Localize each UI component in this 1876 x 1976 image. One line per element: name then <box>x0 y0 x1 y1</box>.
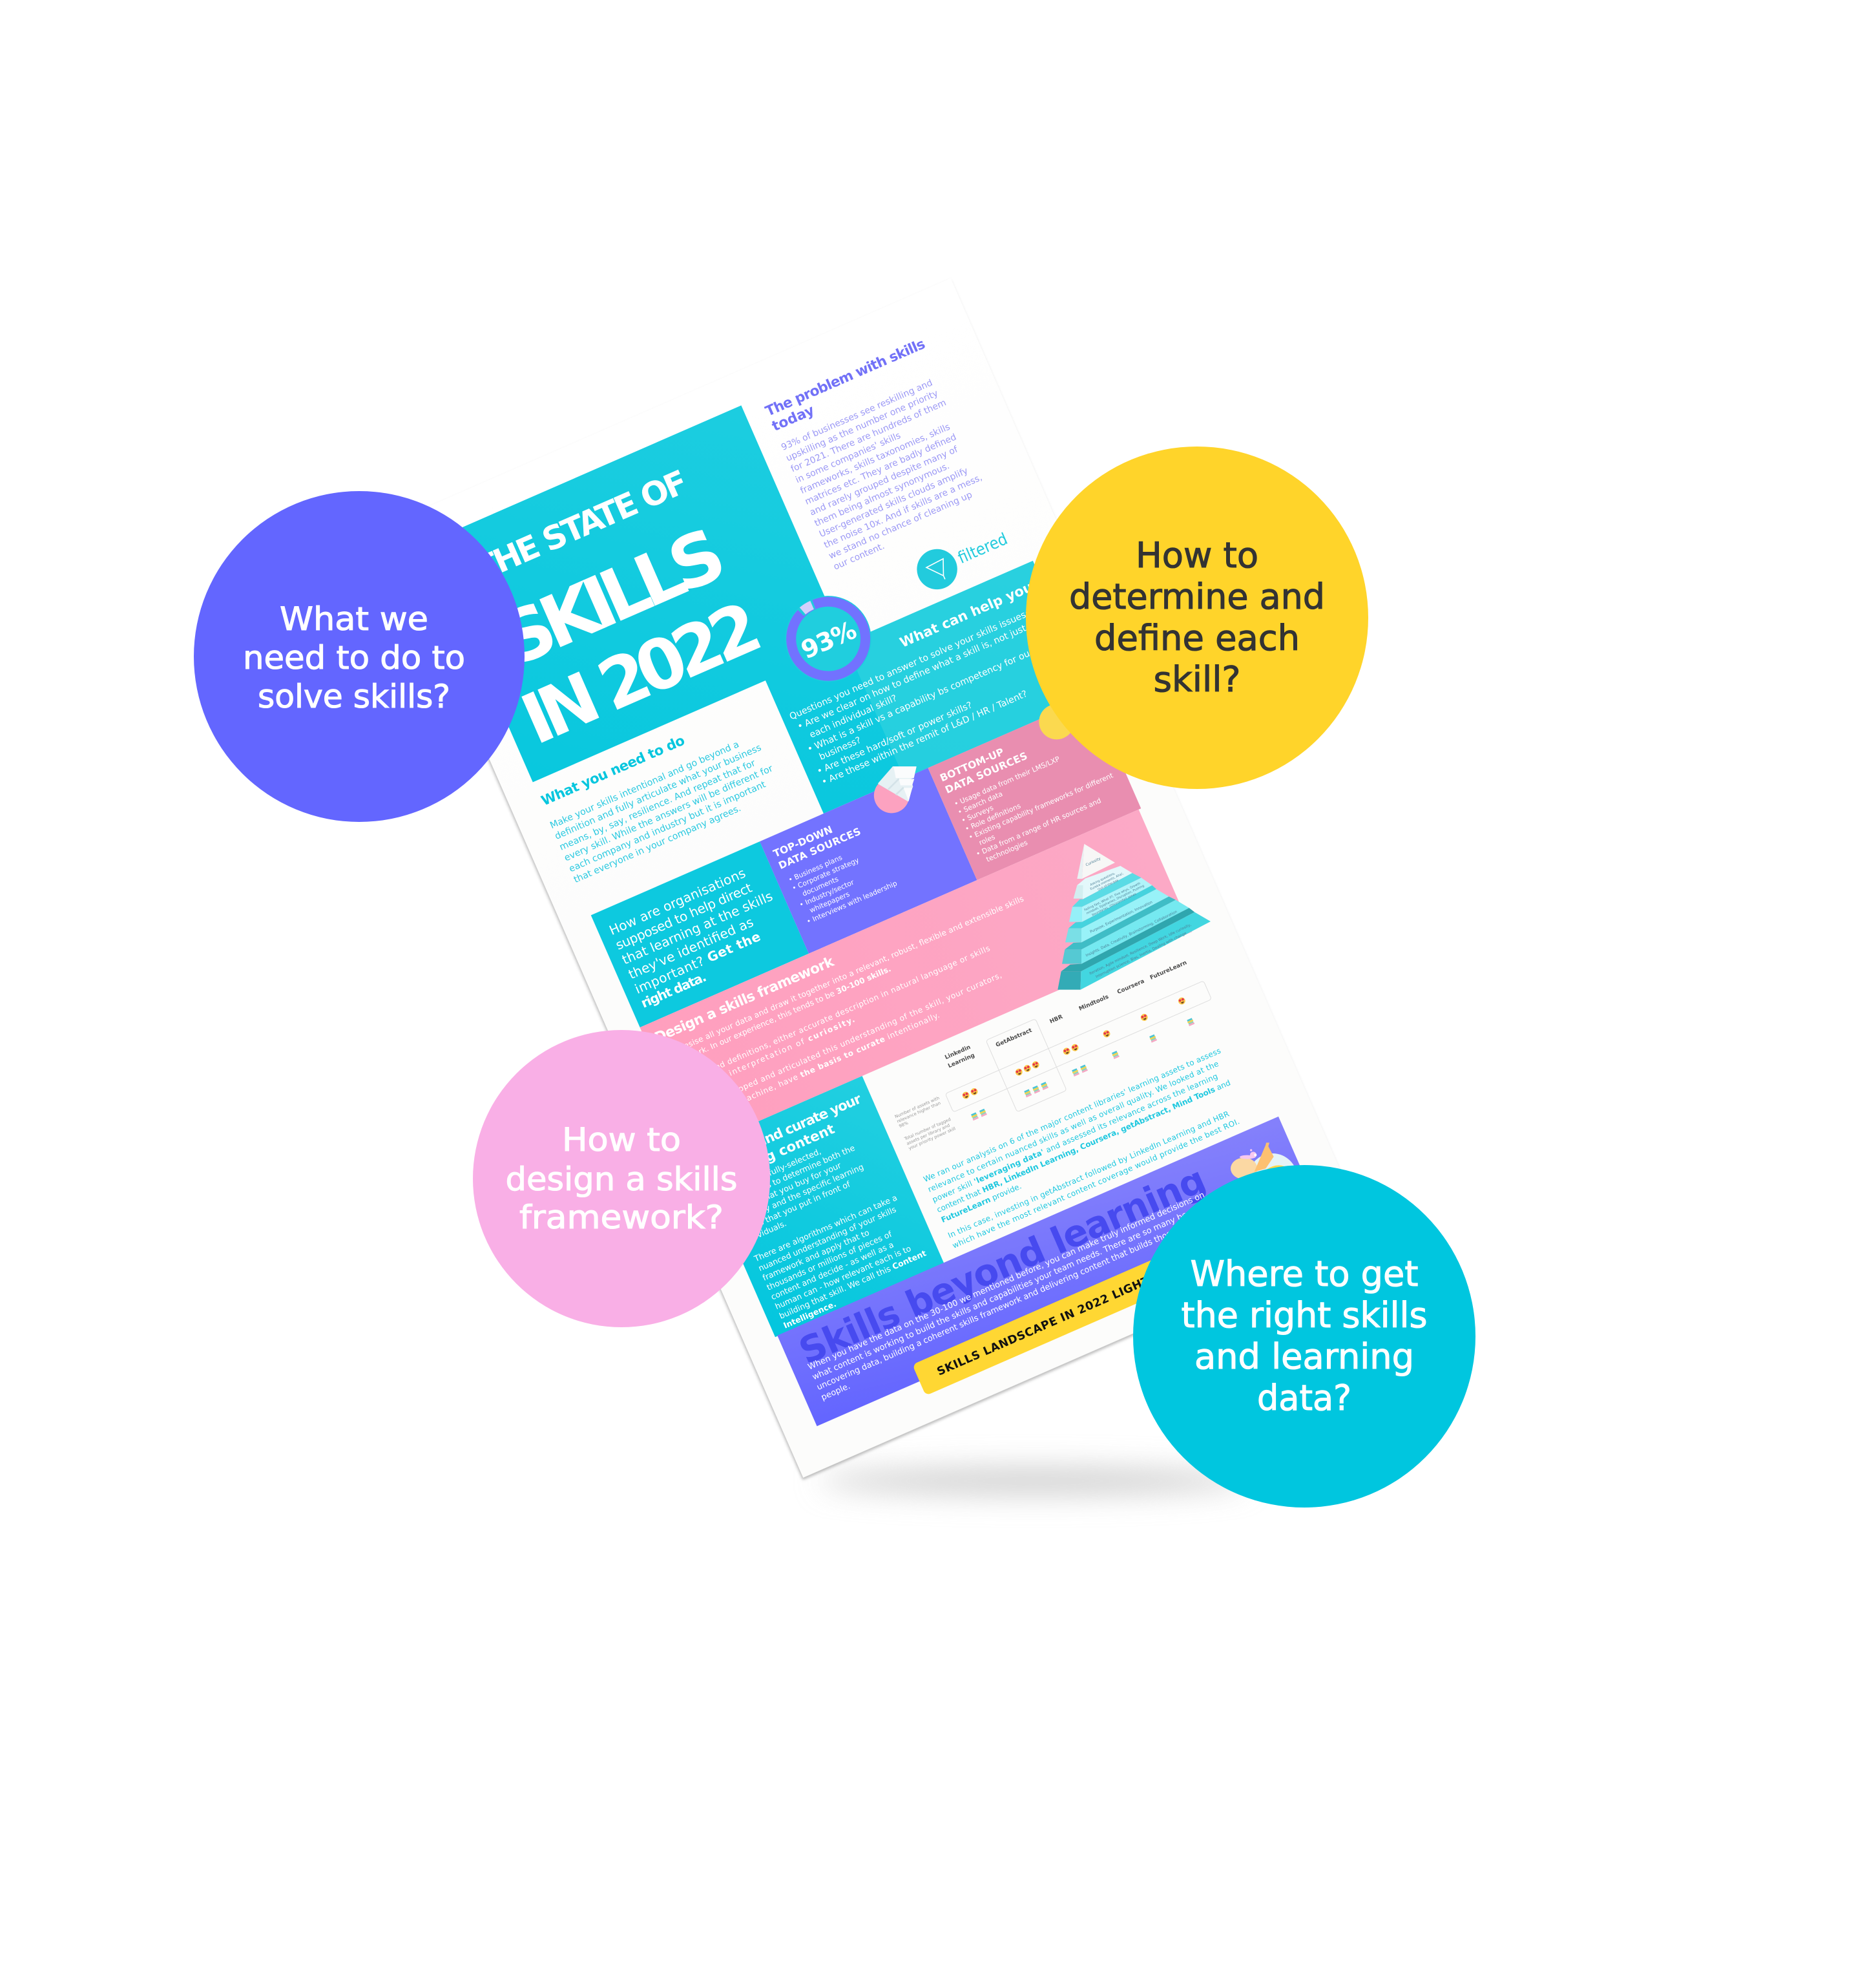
pyramid tier 2: Asking questions, <box>1090 872 1116 887</box>
pyramid tier 1: curiosity <box>1077 844 1115 879</box>
table legend captions: your priority power skill <box>908 1126 957 1151</box>
text block: framework description: Synthesise all your data and draw it together into a relevant, robust, flexible and extensible skills <box>661 894 1025 1060</box>
table column headers: HBR <box>1049 1014 1064 1025</box>
list: top-down sources: • Business plans <box>787 853 844 884</box>
pyramid tier 6: Iteration, Agile mindset, Resilience, Deep Work, Idle curiosity, <box>1089 923 1192 976</box>
text block: problem description: 93% of businesses see reskilling and <box>780 378 934 453</box>
what can help you lighter panel tint <box>845 561 1092 779</box>
text block: skills beyond learning: people. <box>820 1382 851 1403</box>
table column headers: Learning <box>947 1053 976 1069</box>
text block: curation: company and the specific learning <box>734 1162 865 1226</box>
title: the state of: THE STATE OF <box>469 463 693 589</box>
title: skills: SKILLS <box>488 512 738 683</box>
heading: the problem with skills today: The problem with skills <box>763 336 928 420</box>
logo: filtered <box>910 520 1015 596</box>
text block: curation: thousands or millions of pieces of <box>765 1229 893 1292</box>
text block: curation: power skills to determine both the <box>725 1142 857 1207</box>
heading: top-down data sources: DATA SOURCES <box>777 826 862 872</box>
button: skills landscape report: SKILLS LANDSCAPE IN 2022 LIGHTHOUSE REPORT <box>935 1233 1246 1378</box>
pyramid tier 5 <box>1062 896 1189 964</box>
heading: bottom-up data sources: BOTTOM-UP <box>938 746 1006 784</box>
text block: problem description: upskilling as the number one priority <box>784 388 940 464</box>
callout text: solve skills? <box>258 678 450 715</box>
text block: library analysis: We ran our analysis on 6 of the major content libraries' learning assets to assess <box>922 1046 1222 1184</box>
pyramid tier 3: mindset, Epiphanies, Disruption, Pushing <box>1086 884 1145 916</box>
list: top-down sources: • Corporate strategy <box>791 856 860 892</box>
list: top-down sources: • Interviews with leadership <box>806 879 899 926</box>
text block: questions to answer: Questions you need to answer to solve your skills issues: <box>788 609 1030 722</box>
pyramid tier 3 <box>1069 873 1152 922</box>
paper shadow on the ground <box>820 1468 1247 1494</box>
text block: what you need to do: Make your skills intentional and go beyond a <box>548 739 741 831</box>
callout text: skill? <box>1154 659 1240 700</box>
panel: skills beyond learning <box>777 1117 1318 1426</box>
heading: source and curate: learning content <box>713 1120 837 1187</box>
panel: top-down data sources <box>760 768 977 954</box>
text block: questions to answer: • <box>806 743 815 755</box>
text block: library analysis: In this case, investing in getAbstract followed by LinkedIn Learning and HBR <box>946 1109 1231 1240</box>
text block: problem description: matrices etc. They are badly defined <box>804 432 958 507</box>
table column headers: Mindtools <box>1078 994 1110 1013</box>
pyramid tier 4: Purpose, Experimentation, Innovation <box>1090 900 1154 934</box>
heading: top-down data sources: TOP-DOWN <box>771 824 835 860</box>
heading: skills beyond learning: Skills beyond learning <box>793 1159 1212 1373</box>
text block: framework description: Build agreed definitions, either accurate description in natural language or skills <box>674 943 992 1089</box>
panel: design a skills framework <box>640 810 1192 1150</box>
text block: questions to answer: Are these hard/soft or power skills? <box>822 700 974 773</box>
pyramid tier 1: curiosity: Curiosity <box>1085 857 1102 867</box>
heading: the problem with skills today: today <box>769 403 817 435</box>
text block: curation: nuanced understanding of your skills <box>757 1204 897 1273</box>
text block: how are organisations: supposed to help direct <box>613 879 755 953</box>
chart: 93% ring: 93% <box>797 616 861 665</box>
circle callout: determine and define each skill <box>1026 447 1368 789</box>
callout text: How to <box>1136 535 1258 576</box>
icon: pink feather divider <box>874 766 917 813</box>
text block: curation: content and decide - as well as a <box>769 1239 895 1301</box>
pyramid chart: curiosity hierarchy <box>1058 844 1211 990</box>
text block: problem description: our content. <box>832 541 886 573</box>
pyramid tier 2 <box>1074 866 1132 899</box>
panel: bottom-up data sources <box>928 696 1141 880</box>
table legend captions <box>893 1095 957 1151</box>
text block: problem description: and rarely grouped despite many of <box>808 444 960 518</box>
table legend captions: Number of assets with <box>894 1095 940 1119</box>
table legend captions: 98% <box>898 1120 909 1129</box>
text block: problem description: frameworks, skills taxonomies, skills <box>798 422 952 496</box>
text block: skills beyond learning: what content is working to build the skills and capabilities your team needs. There are so many benefits to <box>811 1196 1220 1382</box>
pyramid tier 3: Failing fast, What if?, Five whys, Growth <box>1084 881 1141 912</box>
table column headers: Coursera <box>1116 978 1145 996</box>
text block: questions to answer: What is a skill vs a capability bs competency for our <box>813 647 1035 752</box>
panel: title and what can help you background <box>428 323 1092 915</box>
table legend captions: assets per library and <box>906 1123 951 1146</box>
list: bottom-up sources: • Surveys <box>960 803 995 825</box>
heading: source and curate: Source and curate your <box>705 1090 864 1172</box>
text block: framework description: framework. In our experience, this tends to be 30-100 skills. <box>665 964 892 1070</box>
text block: curation: building that skill. We call this Content <box>778 1248 928 1321</box>
list: bottom-up sources: • Existing capability frameworks for different <box>968 771 1114 841</box>
logo: filtered: filtered <box>955 529 1010 567</box>
panel: source and curate your learning content <box>693 1076 944 1337</box>
text block: what you need to do: each company and industry but it is important <box>568 779 767 874</box>
text block: questions to answer: Are we clear on how to define what a skill is, not just <box>803 623 1028 729</box>
text block: questions to answer: each individual skill? <box>808 693 899 741</box>
list: bottom-up sources: technologies <box>985 838 1029 864</box>
text block: questions to answer: business? <box>818 735 862 762</box>
callout text: the right skills <box>1181 1295 1428 1336</box>
text block: curation: content that you buy for your <box>729 1160 843 1217</box>
text block: curation: framework and apply that to <box>761 1228 871 1283</box>
text block: curation: Intelligence. <box>782 1299 838 1330</box>
text block: how are organisations: important? Get the <box>632 929 763 997</box>
icons: heart-eye emoji row <box>961 996 1187 1100</box>
text block: problem description: them being almost synonymous. <box>813 461 951 529</box>
text block: skills beyond learning: uncovering data, building a coherent skills framework and delivering content that builds those <box>815 1227 1178 1393</box>
text block: problem description: the noise 10x. And if skills are a mess, <box>822 472 984 551</box>
text block: skills beyond learning: When you have the data on the 30-100 we mentioned before, you can make truly informed decisions on <box>806 1190 1206 1372</box>
list: bottom-up sources: roles <box>977 832 997 847</box>
text block: curation: There are algorithms which can take a <box>752 1193 899 1264</box>
callout text: framework? <box>519 1199 724 1236</box>
text block: what you need to do: means, by, say, resilience. And repeat that for <box>558 758 757 853</box>
text block: library analysis: which have the most relevant content coverage would provide the best ROI. <box>951 1117 1241 1250</box>
text block: framework description: human and machine, have the basis to curate intentionally. <box>691 1011 941 1127</box>
text block: what you need to do: definition and fully articulate what your business <box>554 742 763 842</box>
table legend captions: Total number of tagged <box>903 1117 952 1142</box>
text block: how are organisations: right data. <box>639 969 709 1011</box>
callout text: and learning <box>1194 1336 1414 1377</box>
text block: questions to answer: Are these within the remit of L&D / HR / Talent? <box>828 689 1029 784</box>
table frame <box>932 951 1222 1135</box>
table column headers: Linkedin <box>944 1044 972 1061</box>
text block: what you need to do: that everyone in your company agrees. <box>572 803 742 885</box>
title: in 2022: IN 2022 <box>510 587 773 761</box>
circle callout: right skills and learning data <box>1133 1165 1475 1508</box>
list: top-down sources: • Industry/sector <box>798 878 856 909</box>
heading: what can help you: What can help you <box>897 578 1035 651</box>
callout text: How to <box>562 1121 681 1159</box>
list: bottom-up sources: • Usage data from their LMS/LXP <box>953 755 1061 808</box>
table column headers: GetAbstract <box>995 1027 1034 1049</box>
text block: how are organisations: they've identified as <box>626 914 756 982</box>
icon: yellow feather divider <box>1039 697 1081 739</box>
text block: problem description: User-generated skills clouds amplify <box>818 466 970 540</box>
pyramid tier 3: boundaries, (Dis)comfort zones <box>1091 892 1138 917</box>
list: bottom-up sources: • Role definitions <box>964 801 1022 833</box>
table column headers <box>944 951 1188 1069</box>
callout text: design a skills <box>505 1161 738 1198</box>
pyramid tier 4 <box>1065 885 1169 942</box>
text block: curation: human can - how relevant each is to <box>773 1243 912 1311</box>
text block: problem description: in some companies' skills <box>794 430 902 485</box>
list: top-down sources: documents <box>801 875 840 898</box>
text block: problem description: we stand no chance of cleaning up <box>828 490 974 562</box>
pyramid tier 5: Insights, Data, Creativity, Brainstorming, Collaboration <box>1085 910 1178 958</box>
chart: 93% ring <box>772 582 885 695</box>
pyramid tier 6: Interruption science, Bias, Inertia, Dealing with change <box>1095 931 1187 979</box>
callout text: define each <box>1094 618 1300 658</box>
text block: questions to answer: • <box>820 776 829 788</box>
list: bottom-up sources: • Search data <box>957 790 1004 817</box>
text block: questions to answer: • <box>815 765 824 777</box>
text block: questions to answer: • <box>796 720 805 732</box>
text block: library analysis: FutureLearn provide. <box>940 1181 1023 1224</box>
pyramid tier 6 <box>1058 908 1211 990</box>
text block: curation: assets that you put in front of <box>738 1179 852 1236</box>
text block: problem description: for 2021. There are hundreds of them <box>789 397 948 474</box>
document page: The State of Skills in 2022 <box>387 279 1367 1478</box>
callout text: data? <box>1257 1378 1351 1418</box>
button: skills landscape report <box>912 1198 1308 1396</box>
text block: library analysis: relevance to certain nuanced skills as well as overall quality. We looked at the <box>926 1059 1220 1194</box>
list: top-down sources: whitepapers <box>808 890 851 915</box>
illustration: skills beyond learning characters <box>1231 1142 1297 1203</box>
callout text: determine and <box>1069 576 1325 617</box>
text block: what you need to do: every skill. While the answers will be different for <box>563 763 775 863</box>
text block: how are organisations: that learning at the skills <box>620 888 775 967</box>
callout text: need to do to <box>243 639 465 677</box>
icons: book stack row <box>971 1018 1194 1120</box>
paper sheet <box>387 279 1367 1478</box>
table column headers: FutureLearn <box>1149 960 1188 982</box>
heading: what you need to do: What you need to do <box>539 732 687 809</box>
heading: design a skills framework: Design a skills framework <box>652 954 837 1046</box>
text block: library analysis: power skill 'leveraging data' and assessed its relevance across the learning <box>931 1071 1219 1204</box>
circle callout: design a skills framework <box>473 1030 770 1327</box>
callout text: What we <box>280 600 428 638</box>
circle callout: what we need to do <box>194 491 525 822</box>
text block: how are organisations: How are organisations <box>607 865 748 938</box>
text block: framework description: that's one interpretation of curiosity. <box>678 1015 856 1099</box>
pyramid tier 2: Eureka moments, Aha!, <box>1090 872 1125 891</box>
table legend captions: relevance higher than <box>896 1100 941 1124</box>
callout text: Where to get <box>1190 1254 1419 1294</box>
list: bottom-up sources: • Data from a range of HR sources and <box>975 796 1102 858</box>
text block: framework description: Having developed and articulated this understanding of the skill, your curators, <box>685 971 1003 1116</box>
panel: how are organisations <box>591 841 809 1027</box>
heading: bottom-up data sources: DATA SOURCES <box>943 750 1029 796</box>
text block: library analysis: content that HBR, LinkedIn Learning, Coursera, getAbstract, Mind Tools and <box>935 1078 1232 1214</box>
text block: curation: Choose carefully-selected, <box>721 1146 822 1198</box>
comparison table of content libraries <box>880 948 1222 1158</box>
text block: curation: individuals. <box>742 1218 788 1245</box>
pyramid tier 2: Out-of-the-box <box>1097 879 1120 892</box>
